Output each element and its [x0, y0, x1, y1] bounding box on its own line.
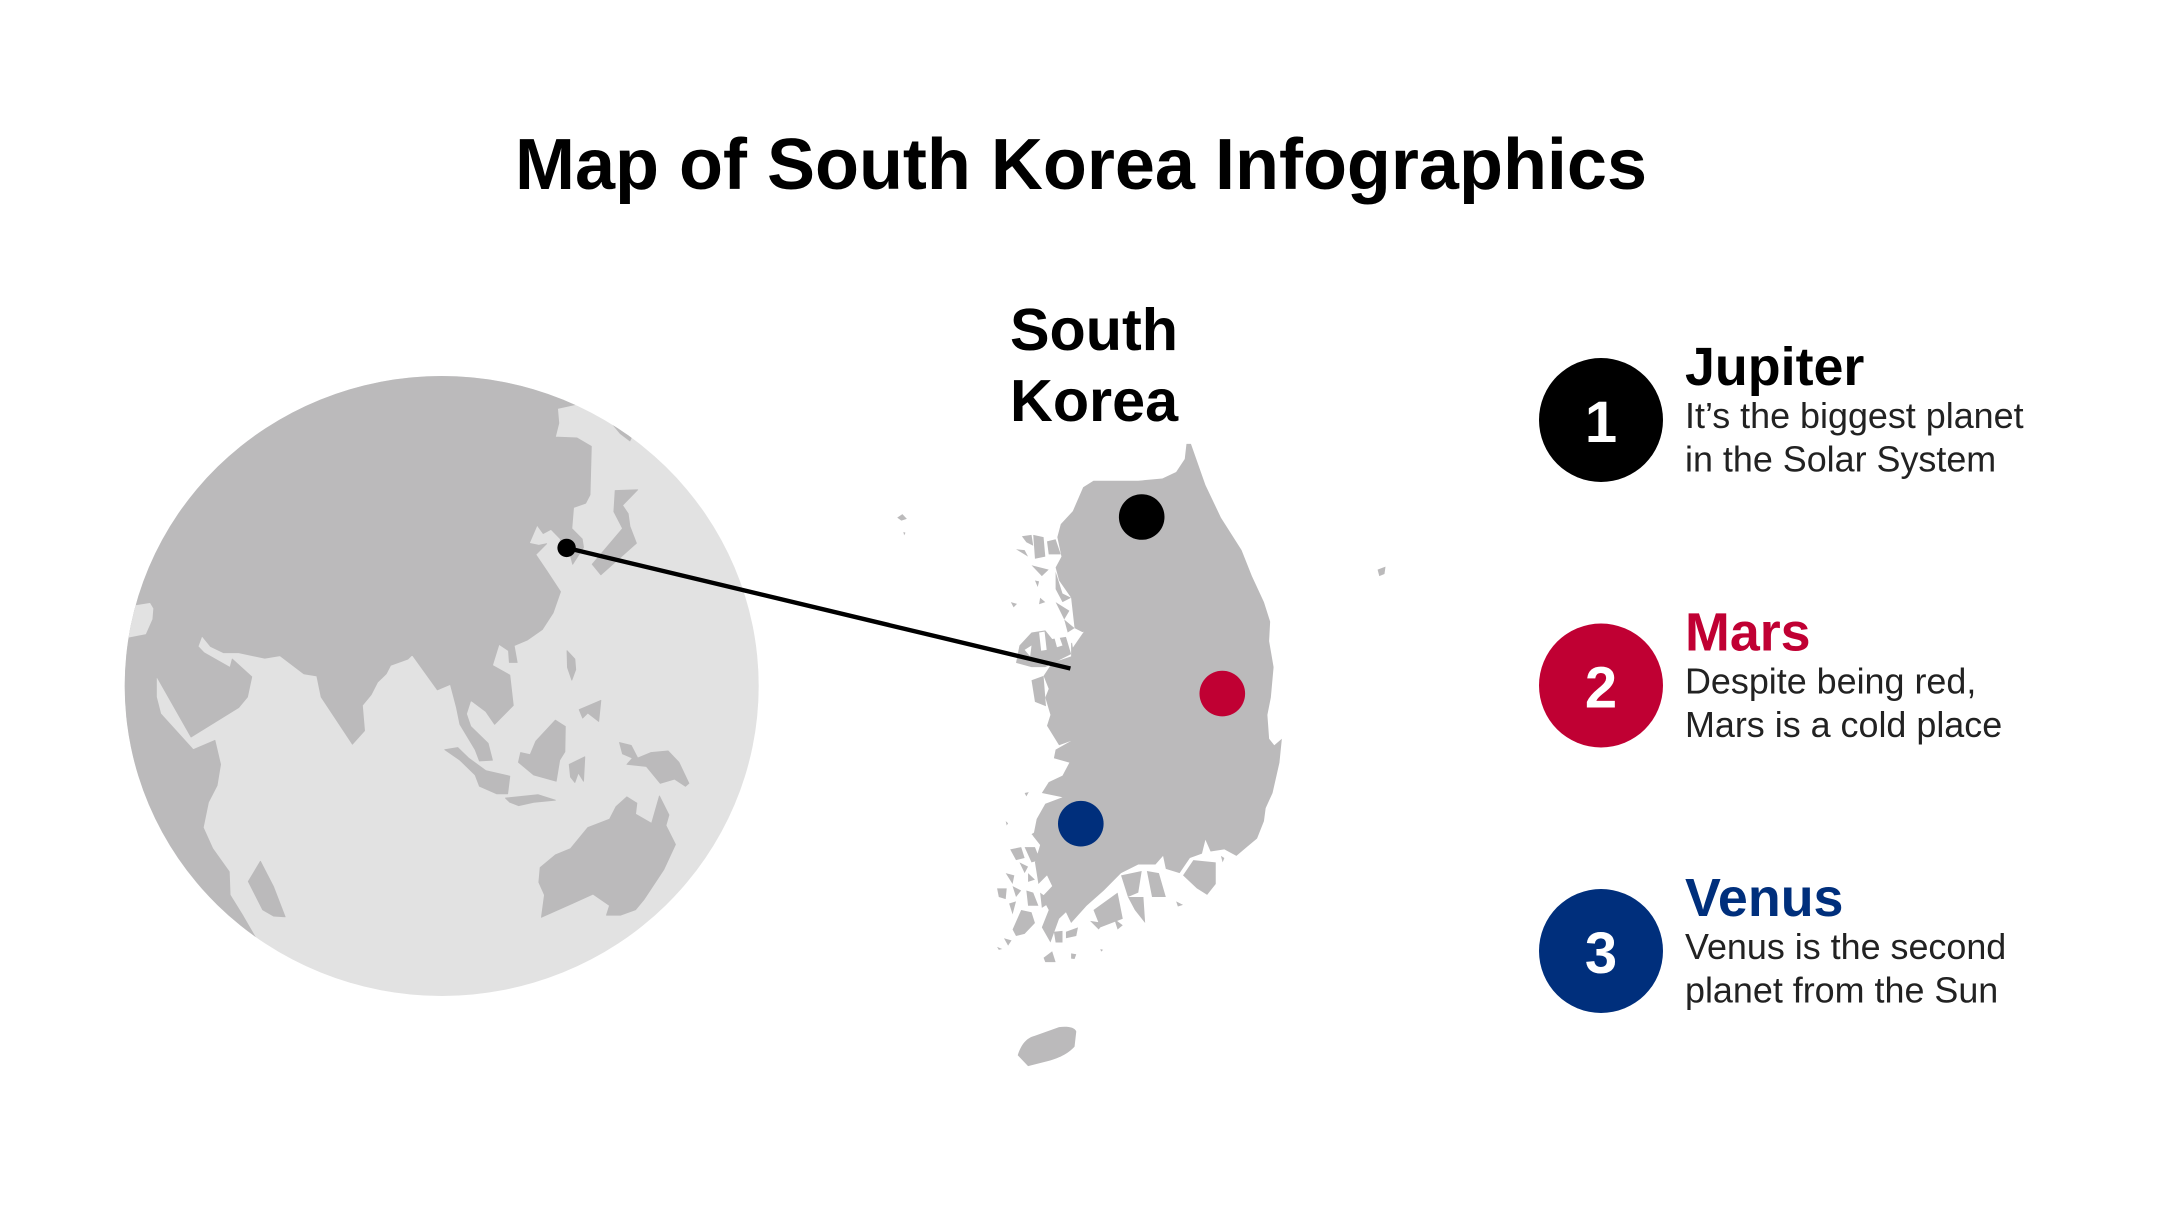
heading Mars: Mars — [1685, 602, 1811, 662]
item 2: Mars — [1539, 602, 2002, 748]
island: Sulawesi — [569, 757, 585, 782]
small western island — [897, 514, 907, 535]
number badge 2 — [1539, 624, 1663, 748]
south coast islands — [1044, 856, 1224, 962]
globe — [124, 376, 759, 996]
island: Java — [505, 795, 555, 806]
heading Jupiter: Jupiter — [1685, 337, 1864, 397]
island: Ulleungdo — [1378, 567, 1386, 576]
sea patch: Mediterranean — [128, 603, 154, 638]
island: New Guinea — [620, 742, 689, 786]
heading Venus: Venus — [1685, 868, 1843, 928]
map marker: Mars — [1200, 671, 1245, 716]
south-west islands — [997, 792, 1052, 950]
location dot on globe — [557, 539, 576, 557]
number badge 2: 2 — [1585, 656, 1617, 720]
country label: Korea — [1010, 367, 1179, 434]
connector line — [567, 548, 1070, 668]
description Venus: Venus is the second — [1685, 927, 2006, 967]
island: Japan — [592, 490, 638, 575]
island: Jeju — [1018, 1027, 1076, 1066]
number badge 3: 3 — [1585, 921, 1617, 986]
west coast strip — [1032, 676, 1046, 706]
island: Philippines — [579, 700, 601, 721]
title: Map of South Korea Infographics — [515, 125, 1647, 205]
number badge 1: 1 — [1585, 390, 1617, 455]
landmass: Eurasia and Africa — [124, 376, 592, 937]
country label: South — [1010, 296, 1178, 363]
number badge 1 — [1539, 358, 1663, 482]
map marker: Venus — [1058, 801, 1104, 846]
mainland — [1033, 444, 1282, 943]
island: Taiwan — [567, 651, 576, 680]
map marker: Jupiter — [1119, 494, 1164, 540]
description Jupiter: in the Solar System — [1685, 440, 1996, 480]
item 3: Venus — [1539, 868, 2006, 1013]
island: Borneo — [518, 720, 565, 781]
island: Madagascar — [248, 861, 285, 917]
Taean inlets — [1025, 627, 1084, 656]
description Mars: Mars is a cold place — [1685, 705, 2002, 745]
island: Sumatra — [445, 748, 510, 794]
island: Kamchatka tip — [612, 423, 631, 441]
item 1: Jupiter — [1539, 337, 2024, 482]
description Jupiter: It’s the biggest planet — [1685, 396, 2024, 436]
number badge 3 — [1539, 889, 1663, 1013]
description Mars: Despite being red, — [1685, 662, 1976, 702]
north-west islands — [1001, 535, 1075, 667]
landmass: Australia — [539, 796, 675, 917]
description Venus: planet from the Sun — [1685, 970, 1998, 1010]
map of South Korea — [897, 444, 1386, 1066]
